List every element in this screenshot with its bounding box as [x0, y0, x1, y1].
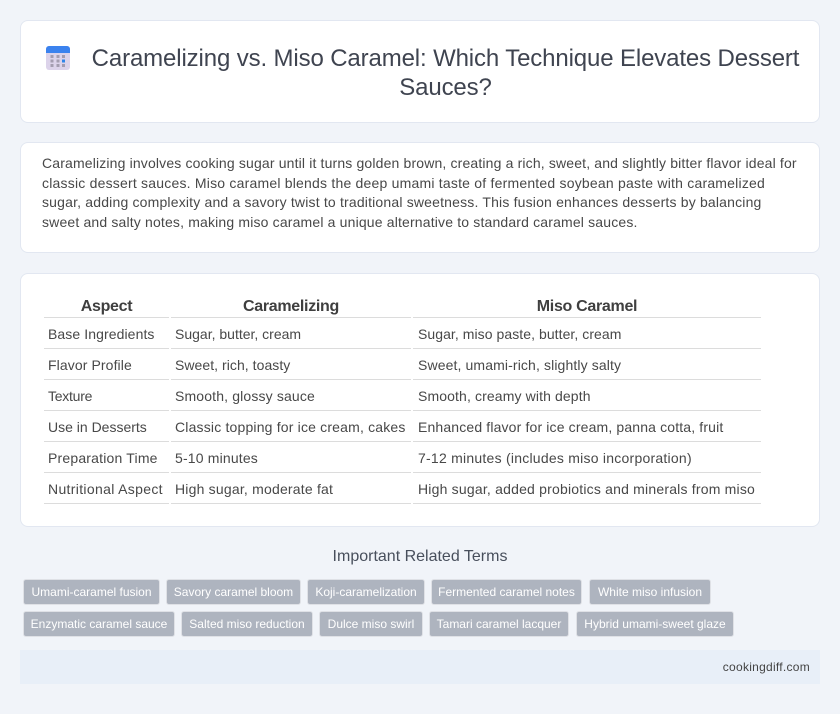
icon: calendar grid: [46, 46, 70, 70]
tag: Hybrid umami-sweet glaze: [584, 617, 726, 631]
tag: Umami-caramel fusion: [31, 585, 152, 599]
panel: comparison table: [20, 273, 820, 527]
tag: Koji-caramelization: [315, 585, 417, 599]
title: Caramelizing vs. Miso Caramel: Which Technique Elevates Dessert: [92, 45, 799, 72]
row: preparation time: [48, 450, 692, 466]
row: nutritional aspect: High sugar, added probiotics and minerals from miso: [418, 481, 755, 497]
row: use in desserts: Use in Desserts: [48, 419, 147, 435]
row: texture: Smooth, creamy with depth: [418, 388, 591, 404]
tag: Savory caramel bloom: [174, 585, 293, 599]
title: [92, 45, 800, 101]
row: base ingredients: Sugar, miso paste, butter, cream: [418, 326, 621, 342]
table header: Caramelizing: [243, 298, 339, 315]
row: flavor profile: Sweet, umami-rich, slightly salty: [418, 357, 621, 373]
row: preparation time: 7-12 minutes (includes miso incorporation): [418, 450, 692, 466]
row: preparation time: Preparation Time: [48, 450, 158, 466]
tag: [319, 611, 423, 637]
intro paragraph: sweet and salty notes, making miso caramel a unique alternative to standard caramel sauces.: [42, 214, 638, 230]
intro paragraph: [42, 155, 797, 230]
row: nutritional aspect: [48, 481, 755, 497]
row: base ingredients: Sugar, butter, cream: [175, 326, 301, 342]
row: base ingredients: Base Ingredients: [48, 326, 155, 342]
row: nutritional aspect: High sugar, moderate fat: [175, 481, 333, 497]
row: preparation time: 5-10 minutes: [175, 450, 258, 466]
row: use in desserts: Enhanced flavor for ice cream, panna cotta, fruit: [418, 419, 723, 435]
tag: Tamari caramel lacquer: [437, 617, 561, 631]
footer bar: [20, 650, 820, 684]
tags: related terms: [23, 579, 734, 637]
table header: [81, 298, 637, 315]
row: use in desserts: [48, 419, 724, 435]
row: texture: [48, 388, 591, 404]
row: flavor profile: Flavor Profile: [48, 357, 132, 373]
tag: White miso infusion: [598, 585, 702, 599]
tag: Salted miso reduction: [189, 617, 305, 631]
row: nutritional aspect: Nutritional Aspect: [48, 481, 163, 497]
tag: Enzymatic caramel sauce: [31, 617, 167, 631]
title panel: [20, 20, 820, 123]
tag: [181, 611, 313, 637]
row: flavor profile: [48, 357, 621, 373]
tag: Fermented caramel notes: [438, 585, 575, 599]
table header: Miso Caramel: [537, 298, 637, 315]
tag: [23, 611, 175, 637]
tag: [589, 579, 711, 605]
tag: [307, 579, 425, 605]
intro paragraph: Caramelizing involves cooking sugar until it turns golden brown, creating a rich, sweet, and slightly bitter flavor ideal for: [42, 155, 797, 171]
tag: Dulce miso swirl: [328, 617, 414, 631]
row: texture: Texture: [48, 388, 92, 404]
intro paragraph: sugar, adding complexity and a savory twist to traditional sweetness. This fusion enhances desserts by balancing: [42, 194, 762, 210]
title: Sauces?: [399, 74, 492, 101]
row: flavor profile: Sweet, rich, toasty: [175, 357, 290, 373]
intro paragraph: classic dessert sauces. Miso caramel blends the deep umami taste of fermented soybean paste with caramelized: [42, 174, 765, 190]
tag: [166, 579, 301, 605]
footer credit: cookingdiff.com: [723, 660, 810, 674]
row: texture: Smooth, glossy sauce: [175, 388, 315, 404]
heading: related terms: Important Related Terms: [333, 548, 507, 565]
row: use in desserts: Classic topping for ice cream, cakes: [175, 419, 406, 435]
tag: [429, 611, 569, 637]
tag: [576, 611, 734, 637]
table header: Aspect: [81, 298, 132, 315]
tag: [431, 579, 582, 605]
tag: [23, 579, 160, 605]
panel: intro text: [20, 142, 820, 253]
row: base ingredients: [48, 326, 621, 342]
